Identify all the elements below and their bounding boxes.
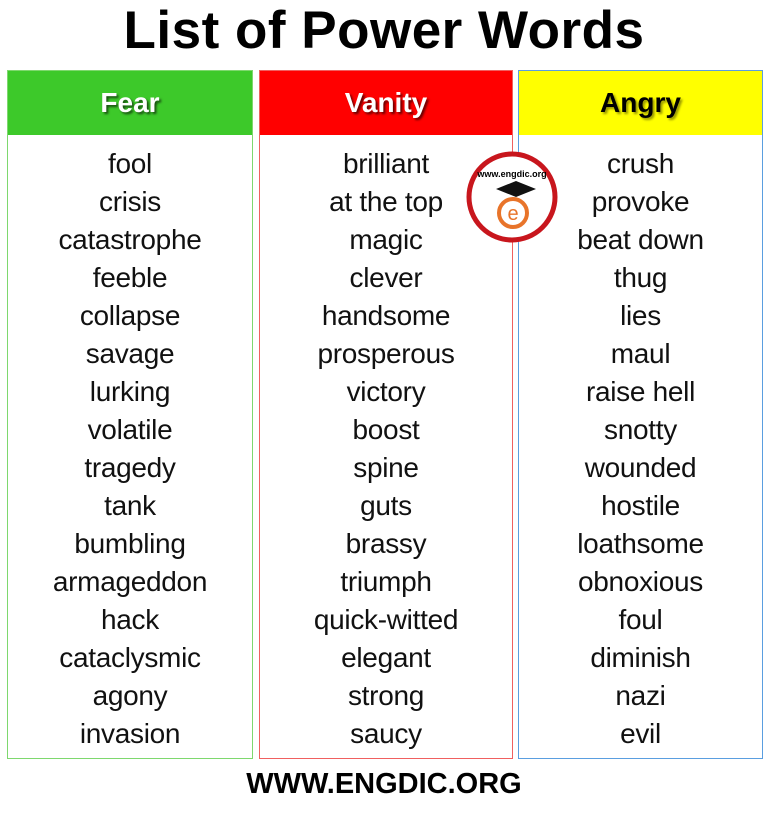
panel: angry [518, 70, 763, 759]
list: fear words: feeble [93, 262, 167, 293]
list: vanity words: strong [348, 680, 424, 711]
list: fear words: agony [93, 680, 167, 711]
list: vanity words: prosperous [317, 338, 455, 369]
list: angry words: loathsome [577, 528, 704, 559]
icon: engdic logo: e [507, 203, 519, 225]
header: vanity [260, 71, 512, 135]
list: fear words: hack [101, 604, 159, 635]
list: vanity words: clever [350, 262, 422, 293]
list: fear words: armageddon [53, 566, 207, 597]
footer url: WWW.ENGDIC.ORG [246, 768, 522, 800]
list: vanity words: at the top [329, 186, 443, 217]
list: vanity words: quick-witted [314, 604, 458, 635]
list: vanity words: boost [352, 414, 420, 445]
list: angry words: nazi [615, 680, 666, 711]
list: angry words: obnoxious [578, 566, 703, 597]
list: vanity words: saucy [350, 718, 422, 749]
icon: engdic logo: www.engdic.org [476, 169, 547, 179]
list: fear words [53, 148, 207, 749]
list: fear words: lurking [90, 376, 170, 407]
list: vanity words [314, 148, 458, 749]
list: vanity words: spine [353, 452, 419, 483]
list: vanity words: guts [360, 490, 412, 521]
list: vanity words: triumph [340, 566, 432, 597]
header: vanity: Vanity [345, 87, 427, 118]
list: vanity words: brilliant [343, 148, 429, 179]
icon: engdic logo [466, 152, 558, 242]
header: fear [8, 71, 252, 135]
list: angry words: thug [614, 262, 667, 293]
list: vanity words: magic [349, 224, 423, 255]
list: angry words: wounded [585, 452, 696, 483]
list: fear words: volatile [88, 414, 172, 445]
list: angry words: provoke [592, 186, 689, 217]
list: vanity words: brassy [346, 528, 426, 559]
list: angry words [577, 148, 704, 749]
list: angry words: foul [619, 604, 662, 635]
list: fear words: tank [104, 490, 156, 521]
list: vanity words: elegant [341, 642, 431, 673]
list: fear words: bumbling [74, 528, 186, 559]
list: fear words: catastrophe [58, 224, 202, 255]
list: angry words: raise hell [586, 376, 695, 407]
header: angry [519, 71, 762, 135]
list: angry words: diminish [590, 642, 691, 673]
list: fear words: invasion [80, 718, 180, 749]
list: fear words: fool [108, 148, 152, 179]
list: angry words: crush [607, 148, 674, 179]
list: angry words: hostile [601, 490, 680, 521]
list: fear words: collapse [80, 300, 180, 331]
panel: fear [7, 70, 253, 759]
list: vanity words: victory [347, 376, 425, 407]
list: angry words: lies [620, 300, 661, 331]
list: angry words: snotty [604, 414, 677, 445]
list: fear words: crisis [99, 186, 161, 217]
header: fear: Fear [100, 87, 160, 118]
list: fear words: savage [86, 338, 174, 369]
panel: vanity [259, 70, 513, 759]
list: angry words: evil [620, 718, 661, 749]
list: angry words: maul [611, 338, 670, 369]
list: fear words: tragedy [84, 452, 176, 483]
header: angry: Angry [600, 87, 681, 118]
list: fear words: cataclysmic [59, 642, 201, 673]
list: angry words: beat down [577, 224, 704, 255]
title: List of Power Words [124, 1, 644, 60]
list: vanity words: handsome [322, 300, 450, 331]
